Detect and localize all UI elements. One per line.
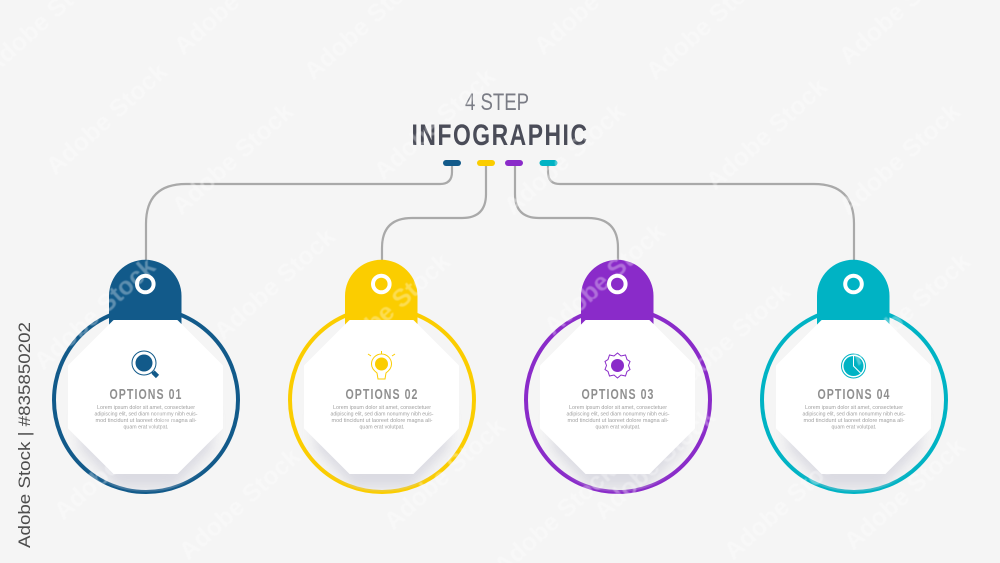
title — [412, 89, 588, 152]
octagon shadow — [76, 436, 216, 492]
white octagon card — [305, 321, 458, 473]
option text: adipiscing elit, sed diam nonummy nibh euis- — [802, 412, 906, 418]
option text — [330, 405, 434, 430]
option heading: OPTIONS 03 — [582, 386, 654, 403]
watermarks: Adobe Stock — [29, 252, 161, 376]
option text: Lorem ipsum dolor sit amet, consectetuer — [805, 405, 903, 411]
watermarks: Adobe Stock — [174, 442, 306, 563]
icon: magnifier — [132, 351, 158, 377]
circle ring — [762, 308, 946, 492]
watermarks: Adobe Stock — [701, 72, 833, 196]
watermarks: Adobe Stock — [379, 412, 511, 536]
watermarks: Adobe Stock — [719, 442, 851, 563]
tab with ring — [581, 260, 654, 325]
option heading: OPTIONS 04 — [818, 386, 890, 403]
watermarks: Adobe Stock — [41, 57, 173, 181]
white octagon card — [777, 321, 930, 473]
option text: quam erat volutpat. — [124, 424, 169, 430]
panel: option 02 — [290, 260, 474, 492]
octagon shadow — [784, 436, 924, 492]
octagon shadow — [312, 436, 452, 492]
white octagon card — [541, 321, 694, 473]
option text: Lorem ipsum dolor sit amet, consectetuer — [97, 405, 195, 411]
option text: quam erat volutpat. — [360, 424, 405, 430]
panel: option 03 — [526, 260, 710, 492]
option heading: OPTIONS 01 — [110, 386, 182, 403]
watermarks: Adobe Stock — [539, 217, 671, 341]
tab with ring — [345, 260, 418, 325]
option text: mod tincidunt ut laoreet dolore magna ali- — [568, 418, 669, 424]
option text: quam erat volutpat. — [832, 424, 877, 430]
watermarks: Adobe Stock — [167, 97, 299, 221]
subtitle: 4 STEP: 4 STEP — [465, 89, 529, 116]
heading: INFOGRAPHIC: INFOGRAPHIC — [412, 119, 588, 152]
option text — [802, 405, 906, 430]
circle ring — [526, 308, 710, 492]
watermarks: Adobe Stock — [369, 62, 501, 186]
option text: adipiscing elit, sed diam nonummy nibh euis- — [566, 412, 670, 418]
stock id side text: Adobe Stock | #835850202 — [16, 322, 34, 548]
icon: badge — [605, 353, 630, 378]
watermarks: Adobe Stock — [499, 97, 631, 221]
circle ring — [290, 308, 474, 492]
watermarks: Adobe Stock — [664, 277, 796, 401]
watermarks: Adobe Stock — [209, 222, 341, 346]
option text: mod tincidunt ut laoreet dolore magna ali- — [804, 418, 905, 424]
option text: quam erat volutpat. — [596, 424, 641, 430]
tab with ring — [109, 260, 182, 325]
watermarks: Adobe Stock — [844, 247, 976, 371]
panel: option 01 — [54, 260, 238, 492]
option text: adipiscing elit, sed diam nonummy nibh euis- — [330, 412, 434, 418]
white octagon card — [69, 321, 222, 473]
connector lines — [146, 165, 854, 262]
circle ring — [54, 308, 238, 492]
watermarks: Adobe Stock — [49, 402, 181, 526]
octagon shadow — [548, 436, 688, 492]
option text: Lorem ipsum dolor sit amet, consectetuer — [333, 405, 431, 411]
watermarks: Adobe Stock — [589, 402, 721, 526]
option text: adipiscing elit, sed diam nonummy nibh euis- — [94, 412, 198, 418]
colored connector pills — [443, 160, 558, 166]
icon: pie chart — [842, 354, 866, 378]
option text: Lorem ipsum dolor sit amet, consectetuer — [569, 405, 667, 411]
watermarks: Adobe Stock — [839, 432, 971, 556]
option text: mod tincidunt ut laoreet dolore magna ali- — [332, 418, 433, 424]
watermarks: Adobe Stock — [324, 247, 456, 371]
panel: option 04 — [762, 260, 946, 492]
option heading: OPTIONS 02 — [346, 386, 418, 403]
watermarks: Adobe Stock — [834, 97, 966, 221]
option text — [94, 405, 198, 430]
option text — [566, 405, 670, 430]
icon: light bulb — [368, 351, 395, 379]
option text: mod tincidunt ut laoreet dolore magna ali- — [96, 418, 197, 424]
tab with ring — [817, 260, 890, 325]
